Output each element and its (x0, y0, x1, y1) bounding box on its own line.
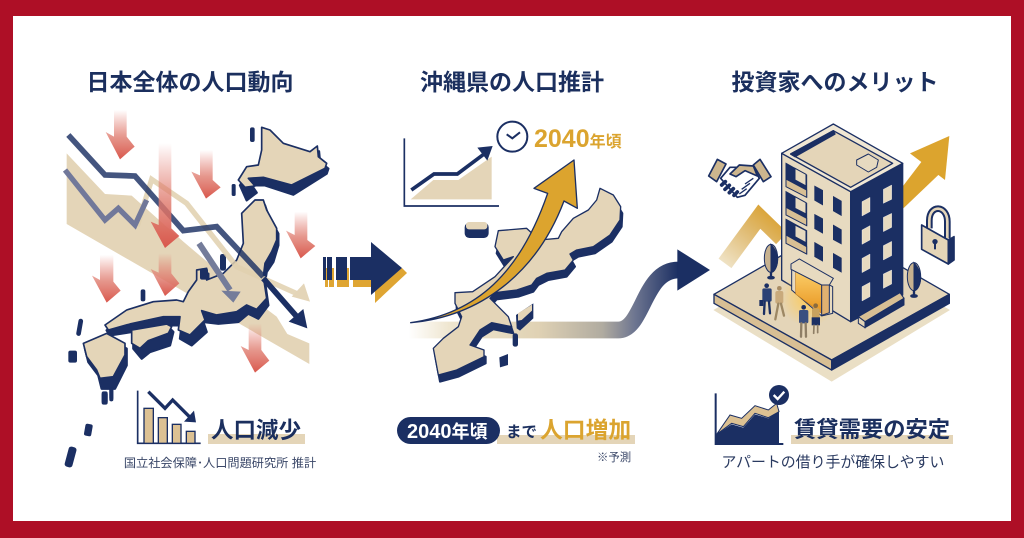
heading: 投資家へのメリット: 投資家へのメリット (732, 69, 938, 95)
label: 2040年頃 まで 人口増加 (397, 417, 635, 444)
Okinawa shadow (435, 195, 622, 382)
grey trend line (65, 170, 147, 225)
declining tan band (67, 153, 309, 364)
people (759, 283, 820, 337)
gold up arrow (411, 160, 577, 323)
heading: 日本全体の人口動向: 日本全体の人口動向 (86, 69, 294, 95)
lit entrance (780, 259, 837, 327)
front windows (814, 185, 842, 273)
icon: handshake (709, 159, 771, 197)
balconies (786, 163, 807, 254)
label: 2040年頃: 2040年頃 (534, 125, 622, 153)
panel: Japan map with declining trend (65, 110, 328, 405)
trees (764, 244, 921, 297)
label: 2040年頃 まで 人口増加: まで (506, 424, 537, 441)
navy trend arrow (68, 135, 307, 328)
source note: 国立社会保障･人口問題研究所 推計 (124, 455, 316, 470)
map shadow of Japan (85, 133, 328, 389)
sub text: アパートの借り手が確保しやすい (722, 454, 944, 471)
icon: clock (497, 122, 527, 152)
arrow: panel 1 to 2 (323, 242, 407, 303)
gold rising arrow (725, 136, 949, 263)
grey down arrow (199, 243, 241, 303)
ground shadow (713, 243, 950, 382)
panel: apartment building (709, 124, 954, 382)
heading: 沖縄県の人口推計: 沖縄県の人口推計 (420, 69, 604, 95)
icon: declining bar chart (64, 387, 201, 468)
label: 賃貸需要の安定: 賃貸需要の安定 (794, 417, 950, 442)
planter bench (858, 293, 904, 328)
Okinawa main island (433, 188, 621, 375)
small islands (465, 222, 533, 367)
building (782, 124, 903, 322)
platform (714, 227, 949, 370)
islands (84, 423, 93, 437)
icon: rental demand chart (716, 385, 789, 444)
label: 人口減少: 人口減少 (211, 418, 301, 443)
small line chart (404, 138, 499, 206)
map of Japan (83, 127, 327, 378)
small islands (68, 127, 255, 405)
panel: Okinawa (404, 122, 710, 382)
red down arrows (92, 110, 315, 373)
tan trend arrow (137, 179, 310, 302)
side windows (862, 185, 892, 301)
icon: padlock (922, 209, 954, 264)
check badge (769, 385, 789, 405)
flow arrow to panel 3 (408, 249, 710, 330)
forecast note: ※予測 (597, 450, 631, 464)
label: 2040年頃 まで 人口増加: 2040年頃 (407, 421, 488, 443)
label: 2040年頃 まで 人口増加: 人口増加 (540, 417, 631, 443)
